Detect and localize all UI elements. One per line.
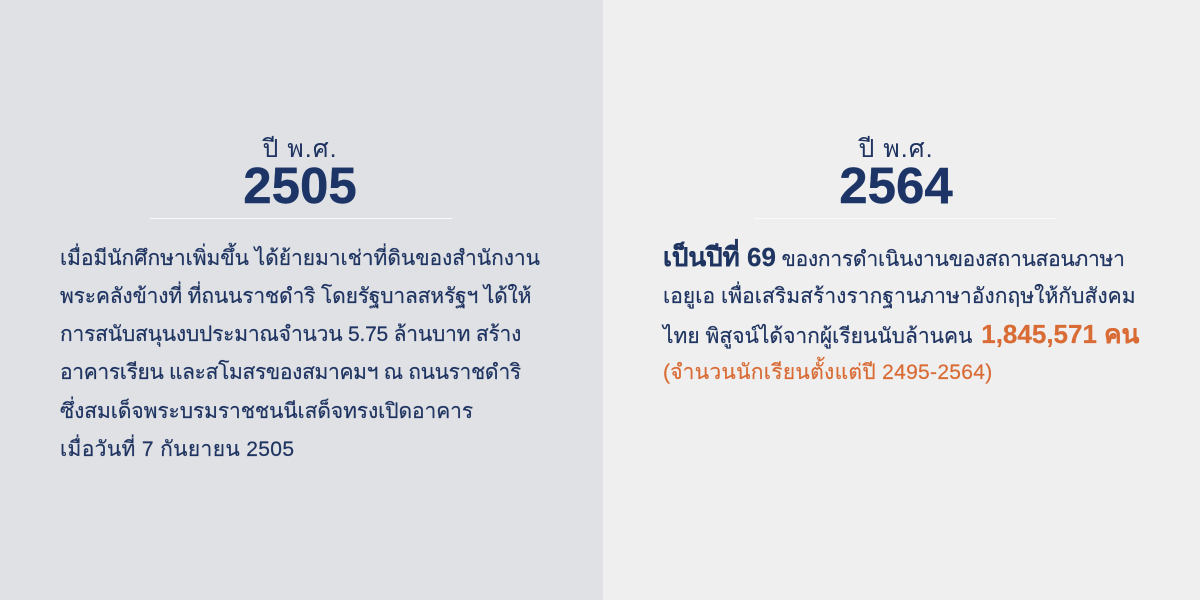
divider bbox=[754, 218, 1056, 219]
divider bbox=[150, 218, 452, 219]
text block: 2564 description: เอยูเอ เพื่อเสริมสร้างรากฐานภาษาอังกฤษให้กับสังคม bbox=[663, 285, 1136, 308]
heading: 2564: 2564 bbox=[839, 157, 953, 214]
text block: history 2505: การสนับสนุนงบประมาณจำนวน 5.75 ล้านบาท สร้าง bbox=[60, 323, 521, 346]
text block: history 2505: อาคารเรียน และสโมสรของสมาคมฯ ณ ถนนราชดำริ bbox=[60, 361, 521, 384]
label: year prefix: ปี พ.ศ. bbox=[262, 135, 338, 163]
panel: 2564 bbox=[603, 0, 1200, 600]
text block: history 2505: พระคลังข้างที่ ที่ถนนราชดำริ โดยรัฐบาลสหรัฐฯ ได้ให้ bbox=[60, 285, 531, 308]
text block: history 2505: ซึ่งสมเด็จพระบรมราชชนนีเสด็จทรงเปิดอาคาร bbox=[60, 400, 473, 423]
panel: 2505 bbox=[0, 0, 603, 600]
heading: 2505: 2505 bbox=[243, 157, 357, 214]
text block: 2564 description bbox=[662, 238, 1140, 384]
text block: 2564 description: ไทย พิสูจน์ได้จากผู้เรียนนับล้านคน 1,845,571 คน bbox=[663, 319, 1139, 349]
text block: history 2505: เมื่อวันที่ 7 กันยายน 2505 bbox=[60, 438, 294, 461]
text block: history 2505 bbox=[60, 242, 540, 461]
text block: 2564 description: เป็นปีที่ 69 ของการดำเนินงานของสถานสอนภาษา bbox=[663, 242, 1125, 272]
text block: 2564 description: (จำนวนนักเรียนตั้งแต่ปี 2495-2564) bbox=[663, 361, 993, 384]
text block: history 2505: เมื่อมีนักศึกษาเพิ่มขึ้น ได้ย้ายมาเช่าที่ดินของสำนักงาน bbox=[60, 247, 540, 270]
label: year prefix: ปี พ.ศ. bbox=[858, 135, 934, 163]
